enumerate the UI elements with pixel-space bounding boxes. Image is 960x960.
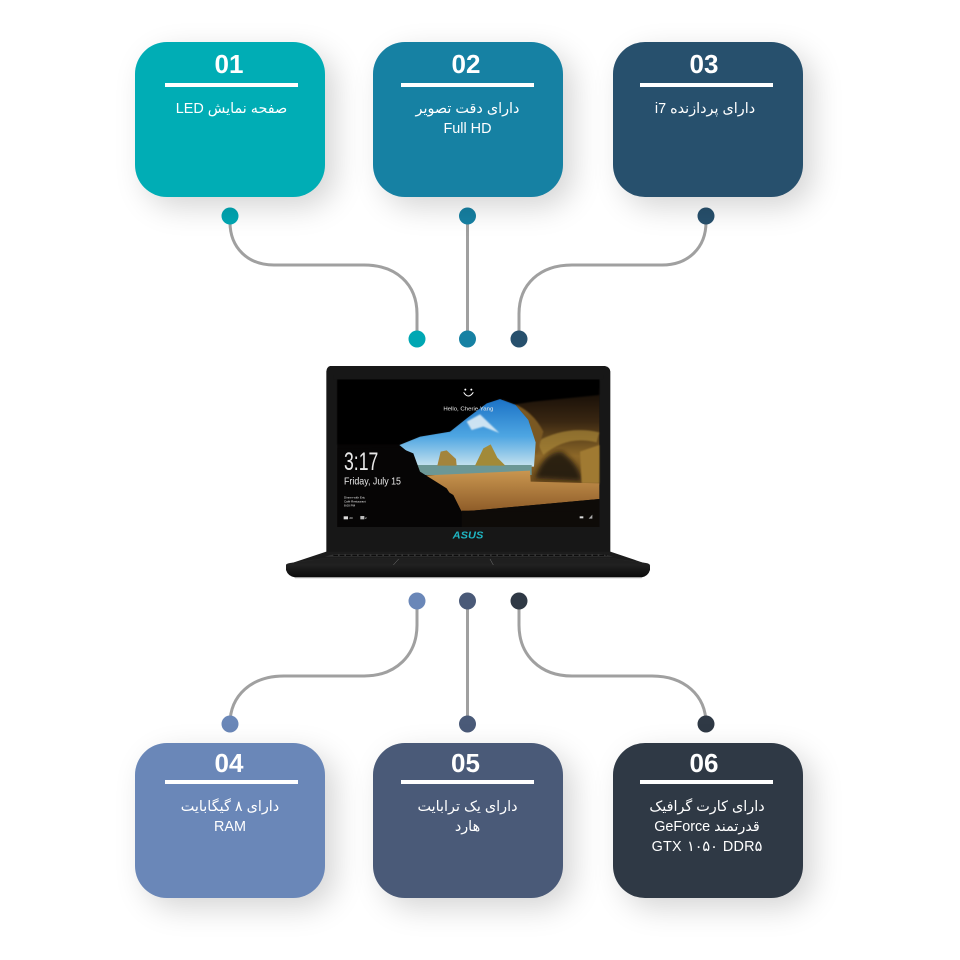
wallpaper: sand — [422, 471, 599, 512]
panel: feature 03 — [613, 42, 803, 197]
lock screen texts: 8:00 PM — [344, 504, 356, 508]
text 04: RAM — [214, 819, 246, 835]
laptop illustration — [286, 366, 650, 579]
number 01: 01 — [215, 49, 243, 79]
text 06 — [649, 798, 765, 855]
connector 06 — [510, 592, 714, 732]
text 06: دارای کارت گرافیک — [649, 799, 765, 815]
number 06: 06 — [690, 748, 718, 778]
lock screen texts: 2 — [365, 516, 367, 520]
wallpaper: sea stacks — [437, 450, 457, 466]
lock screen texts: Hello, Cherie Yang — [443, 407, 493, 413]
lock screen texts: Café Restaurant — [344, 499, 366, 503]
number 05: 05 — [451, 748, 480, 778]
wallpaper: sea — [417, 465, 532, 475]
panel: feature 06 — [613, 743, 803, 898]
text 06: GTX ۱۰۵۰ DDR۵ — [652, 839, 762, 855]
connector 02 — [459, 208, 476, 348]
lock screen texts: 3:17 — [344, 448, 378, 476]
panel: feature 05 — [372, 743, 562, 898]
lock screen texts: 20 — [349, 516, 353, 520]
number 02: 02 — [452, 49, 480, 79]
lock screen smiley — [464, 389, 473, 396]
text 01: صفحه نمایش LED — [176, 101, 287, 117]
connector 05 — [459, 592, 476, 732]
wallpaper: sky — [399, 399, 536, 467]
laptop base — [286, 558, 650, 578]
wallpaper: foreground rock — [337, 448, 462, 527]
ASUS logo: ASUS — [452, 530, 484, 541]
lock screen texts — [344, 407, 493, 520]
panel: feature 02 — [372, 42, 562, 197]
text 02: Full HD — [444, 121, 491, 137]
panel: feature 04 — [135, 743, 325, 898]
laptop lid — [326, 366, 610, 555]
text 02: دارای دقت تصویر — [416, 101, 519, 117]
laptop screen — [333, 375, 603, 527]
laptop keyboard deck — [286, 552, 650, 565]
number 03: 03 — [690, 49, 718, 79]
text 04: دارای ۸ گیگابایت — [181, 799, 279, 815]
connector 03 — [510, 208, 714, 348]
text 04 — [181, 798, 279, 835]
text 03: دارای پردازنده i7 — [655, 101, 755, 117]
text 05 — [418, 799, 517, 835]
text 02 — [414, 101, 519, 137]
text 05: دارای یک ترابایت — [418, 799, 517, 815]
text 06: قدرتمند GeForce — [654, 819, 760, 835]
lock screen texts: Dinner with Eric — [344, 495, 366, 499]
connector 01 — [222, 208, 426, 348]
panel: feature 01 — [135, 42, 325, 197]
connector 04 — [222, 592, 426, 732]
lock screen texts: Friday, July 15 — [344, 476, 401, 487]
number 04: 04 — [215, 748, 243, 778]
wallpaper: cave rock — [500, 388, 599, 485]
text 05: هارد — [455, 819, 480, 835]
